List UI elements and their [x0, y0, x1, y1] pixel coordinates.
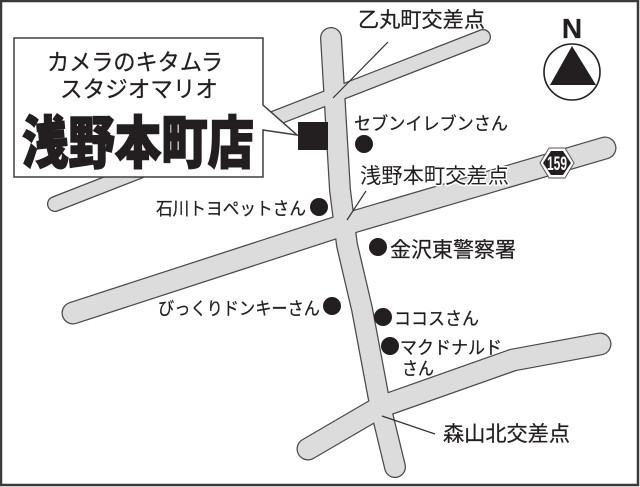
- label: 浅野本町交差点: 浅野本町交差点: [360, 165, 509, 188]
- studio name: スタジオマリオ: [60, 76, 218, 102]
- store name heading: 浅野本町店: [22, 112, 254, 176]
- label: 森山北交差点: 森山北交差点: [443, 423, 570, 446]
- label: 石川トヨペットさん: 石川トヨペットさん: [156, 199, 306, 219]
- label: びっくりドンキーさん: びっくりドンキーさん: [158, 299, 320, 319]
- landmark dots: [310, 135, 399, 355]
- label: セブンイレブンさん: セブンイレブンさん: [354, 113, 508, 134]
- company name: カメラのキタムラ: [47, 49, 223, 75]
- leader line: 浅野本町交差点: [347, 191, 366, 220]
- label: マクドナルドさん: さん: [402, 359, 434, 379]
- label: ココスさん: ココスさん: [394, 309, 479, 329]
- label: 乙丸町交差点: 乙丸町交差点: [358, 9, 485, 32]
- leader line: 乙丸町交差点: [333, 42, 388, 98]
- north compass: [544, 13, 600, 100]
- label: マクドナルドさん: マクドナルド: [400, 338, 502, 358]
- callout: store name: [14, 38, 297, 177]
- store location marker: [298, 122, 328, 150]
- route 159 shield: 159: [547, 154, 567, 175]
- north letter: N: [562, 13, 582, 44]
- road network: [55, 37, 605, 467]
- leader line: 森山北交差点: [382, 416, 435, 434]
- label: 金沢東警察署: 金沢東警察署: [390, 239, 516, 262]
- route 159 shield: [540, 148, 574, 178]
- label: マクドナルドさん: [400, 338, 502, 379]
